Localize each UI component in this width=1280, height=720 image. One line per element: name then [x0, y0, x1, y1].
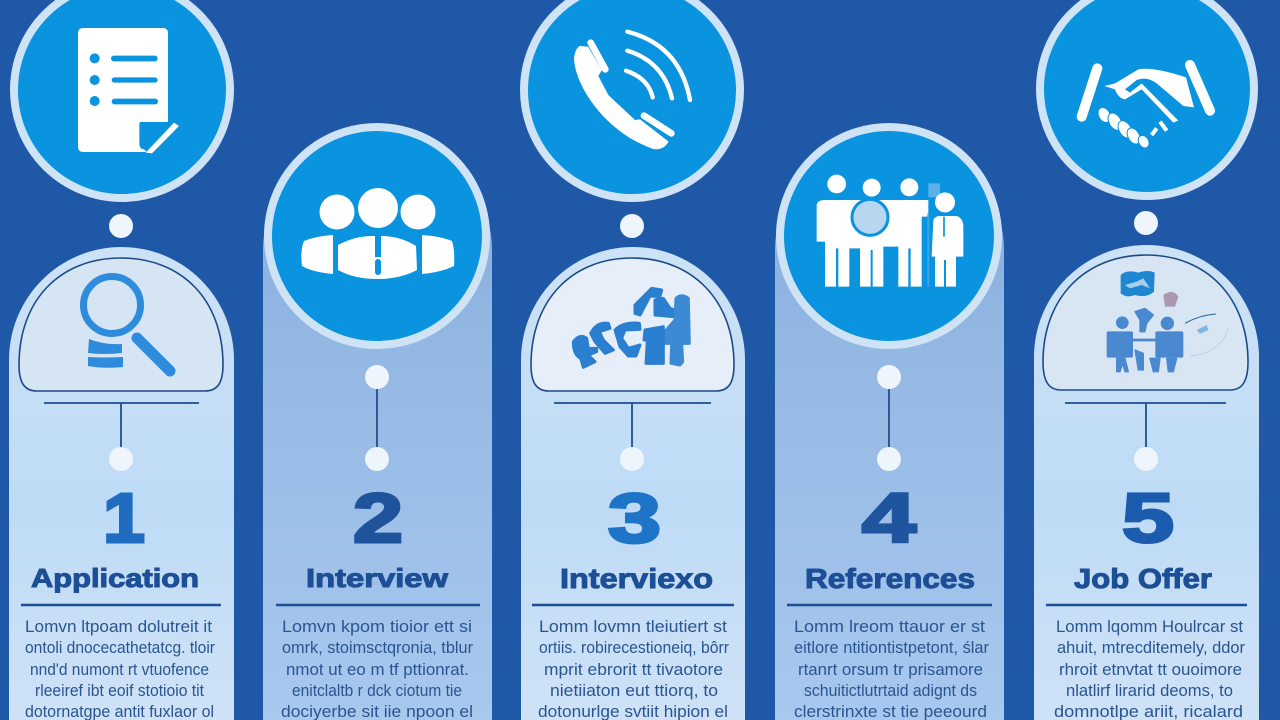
number 4: 4: [862, 479, 916, 557]
body text 1: nnd'd numont rt vtuofence: [30, 660, 209, 679]
body text 5: rhroit etnvtat tt ouoimore: [1059, 660, 1242, 679]
badge: step 1 circle: [14, 0, 230, 198]
body text 1: ontoli dnocecathetatcg. tloir: [25, 638, 215, 657]
heading: Application: Application: [31, 563, 199, 593]
body text 5: [1054, 617, 1245, 720]
connector: [554, 403, 711, 450]
body text 1: rleeiref ibt eoif stotioio tit: [35, 681, 204, 700]
connector node top: [109, 214, 133, 238]
icon: figures at table: [573, 288, 689, 367]
body text 3: ortiis. robirecestioneiq, bôrr: [539, 638, 729, 657]
connector node: [1134, 447, 1158, 471]
icon: handshake: [1082, 65, 1210, 150]
connector node upper: [365, 365, 389, 389]
body text 5: nlatlirf lirarid deoms, to: [1066, 681, 1233, 700]
body text 4: eitlore ntitiontistpetont, ślar: [794, 638, 989, 657]
heading rule: [21, 604, 221, 606]
panel: step 3 card: [521, 247, 745, 720]
heading rule: [276, 604, 480, 606]
badge: step 2 circle: [268, 127, 486, 345]
connector node upper: [877, 365, 901, 389]
connector: [44, 403, 199, 450]
heading: Interview: Interviexo: [560, 563, 713, 594]
connector: [1065, 403, 1226, 450]
heading rule: [532, 604, 734, 606]
icon: magnifying glass: [84, 276, 170, 371]
heading rule: [1046, 604, 1247, 606]
icon frame: step 5 dome: [1043, 255, 1248, 390]
body text 3: nietiiaton eut ttiorq, to: [550, 681, 718, 700]
body text 5: Lomm lqomm Houlrcar st: [1056, 617, 1243, 636]
connector node top: [1134, 211, 1158, 235]
icon: telephone with signal: [574, 32, 690, 149]
step 5: Job Offer: [1034, 0, 1259, 720]
icon: three people: [301, 188, 454, 279]
connector node: [620, 447, 644, 471]
body text 2: [281, 617, 473, 720]
icon: document: [78, 28, 179, 153]
icon: team of four: [817, 175, 963, 287]
step 1: Application: [9, 0, 234, 720]
heading: References: References: [805, 563, 975, 594]
connector: [376, 377, 378, 459]
panel: step 1 card: [9, 247, 234, 720]
heading rule: [787, 604, 992, 606]
connector node lower: [365, 447, 389, 471]
heading: Interview: Interview: [306, 563, 449, 593]
connector node: [109, 447, 133, 471]
step 2: Interview: [263, 127, 492, 720]
badge: step 5 circle: [1040, 0, 1254, 196]
number 2: 2: [353, 479, 403, 557]
panel: step 5 card: [1034, 245, 1259, 720]
heading: Job Offer: Job Offer: [1074, 563, 1212, 594]
body text 2: enitclaltb r dck ciotum tie: [292, 681, 462, 700]
body text 4: schuitictlutrtaid adignt ds: [804, 681, 977, 700]
panel: step 4 card: [775, 136, 1004, 720]
body text 2: omrk, stoimsctqronia, tblur: [282, 638, 473, 657]
badge: step 4 circle: [780, 127, 998, 345]
body text 3: mprit ebrorit tt tivaotore: [544, 660, 723, 679]
connector node lower: [877, 447, 901, 471]
step 3: Interview: [521, 0, 745, 720]
body text 4: rtanrt orsum tr prisamore: [798, 660, 983, 679]
body text 1: [25, 617, 215, 720]
body text 2: Lomvn kpom tioior ett si: [282, 617, 472, 636]
number 1: 1: [103, 479, 145, 557]
badge: step 3 circle: [524, 0, 740, 198]
body text 5: ahuit, mtrecditemely, ddor: [1057, 638, 1245, 657]
number 3: 3: [608, 479, 661, 557]
connector: [888, 377, 890, 459]
body text 3: [538, 617, 729, 720]
body text 3: Lomm lovmn tleiutiert st: [539, 617, 727, 636]
icon frame: step 3 dome: [531, 258, 734, 391]
panel: step 2 card: [263, 136, 492, 720]
connector node top: [620, 214, 644, 238]
body text 4: Lomm lreom ttauor er st: [794, 617, 985, 636]
icon: meeting scene: [1107, 271, 1228, 372]
body text 4: [794, 617, 989, 720]
icon frame: step 1 dome: [19, 258, 223, 391]
body text 2: nmot ut eo m tf pttionrat.: [286, 660, 469, 679]
number 5: 5: [1122, 479, 1174, 557]
body text 1: Lomvn ltpoam dolutreit it: [25, 617, 212, 636]
step 4: References: [775, 127, 1004, 720]
